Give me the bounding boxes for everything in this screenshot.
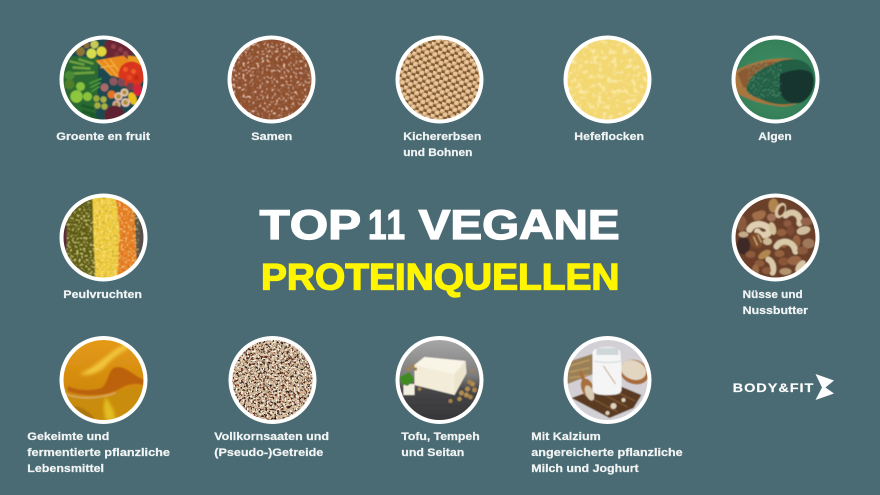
item: Kichererbsen und Bohnen [396,36,484,159]
photo: chickpeas [396,36,484,124]
item: Mit Kalzium angereicherte pflanzliche Milch und Joghurt: angereicherte pflanzliche [531,447,683,459]
heading line 1: TOP [260,201,361,248]
item: Algen [732,36,820,143]
label: Hefeflocken [574,131,644,143]
item: Tofu, Tempeh und Seitan [396,336,484,459]
label: Peulvruchten [63,289,142,301]
item: Gekeimte und fermentierte pflanzliche Lebensmittel [27,336,170,475]
label: Gekeimte und [27,431,109,443]
heading line 1 [260,201,620,248]
item: Mit Kalzium angereicherte pflanzliche Milch und Joghurt [531,336,683,475]
photo: plant milk with oats [564,336,653,424]
photo: spirulina on a wooden spoon [732,36,820,124]
title block [260,201,620,298]
item: Groente en fruit [56,34,150,143]
heading line 1: 11 [368,201,405,248]
photo: yeast flakes [564,36,652,124]
item: Hefeflocken [564,36,652,143]
item: Tofu, Tempeh und Seitan: und Seitan [401,447,465,459]
item: Kichererbsen und Bohnen: und Bohnen [403,147,473,159]
item: Nüsse und Nussbutter [732,194,820,317]
item: Gekeimte und fermentierte pflanzliche Lebensmittel: fermentierte pflanzliche [27,447,170,459]
item: Mit Kalzium angereicherte pflanzliche Milch und Joghurt: Milch und Joghurt [531,463,639,475]
heading line 1: VEGANE [419,201,620,248]
label: Kichererbsen [403,131,482,143]
label: Nüsse und [743,289,803,301]
label: Vollkornsaaten und [214,431,329,443]
photo: quinoa [228,336,316,424]
label: Algen [758,131,792,143]
item: Vollkornsaaten und (Pseudo-)Getreide [214,336,329,459]
photo: flax seeds [228,36,316,124]
photo: mixed nuts [732,194,820,282]
item: Peulvruchten [60,194,148,301]
item: Samen [228,36,316,143]
item: Gekeimte und fermentierte pflanzliche Lebensmittel: Lebensmittel [27,463,104,475]
label: Samen [251,131,293,143]
label: Tofu, Tempeh [401,431,480,443]
item: Nüsse und Nussbutter: Nussbutter [743,305,809,317]
photo: tofu block with soybeans [396,336,484,424]
label: Groente en fruit [56,131,150,143]
heading line 2: PROTEINQUELLEN [261,257,620,298]
logo wordmark: BODY&FIT [733,381,814,395]
item: Vollkornsaaten und (Pseudo-)Getreide: (Pseudo-)Getreide [214,447,323,459]
photo: lentils in three colours [60,194,148,282]
photo: vegetables and fruit [60,34,148,126]
logo: Body&Fit [733,374,834,400]
logo icon [816,374,834,400]
label: Mit Kalzium [531,431,601,443]
photo: fermented food [60,336,148,424]
